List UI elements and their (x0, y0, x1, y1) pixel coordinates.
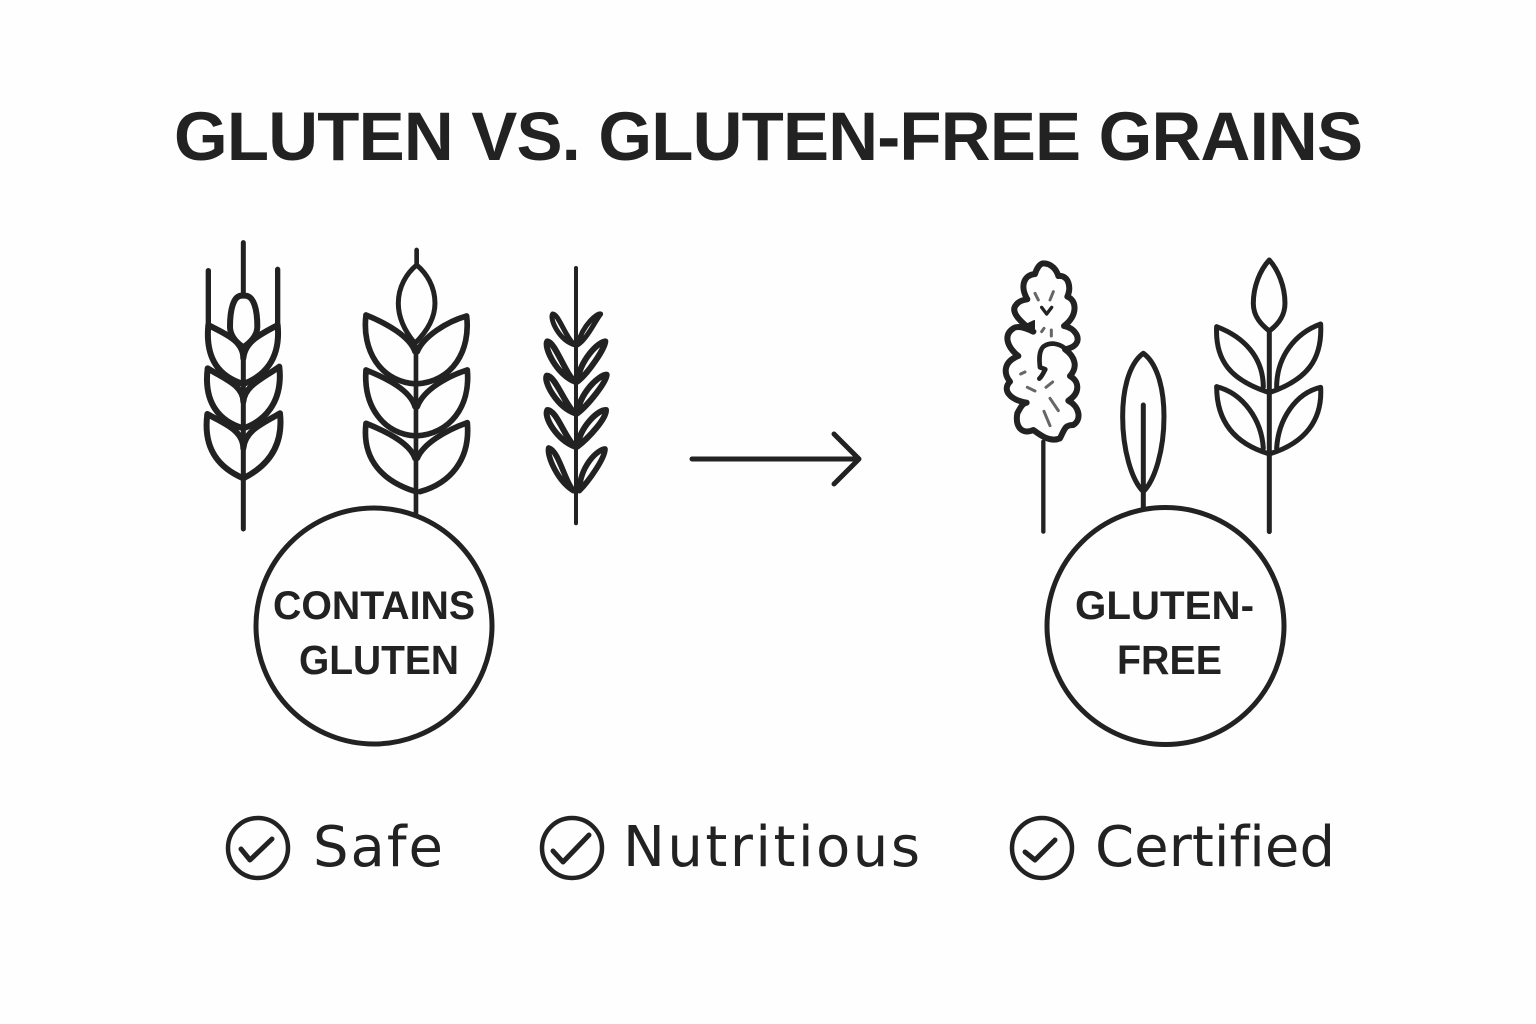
badge: contains gluten: GLUTEN (299, 637, 459, 683)
badge: gluten-free: FREE (1117, 637, 1222, 683)
icon: wheat with awns (207, 243, 280, 529)
icon: millet (1123, 353, 1164, 508)
badge: gluten-free: GLUTEN- (1075, 584, 1254, 628)
item: safe: Safe (313, 815, 443, 880)
item: nutritious: Nutritious (623, 815, 920, 880)
badge: contains gluten (256, 508, 492, 744)
badge: contains gluten: CONTAINS (273, 584, 475, 628)
item: safe (228, 815, 443, 880)
arrow (692, 434, 859, 484)
badge: gluten-free (1047, 508, 1284, 744)
title: GLUTEN VS. GLUTEN-FREE GRAINS (174, 98, 1363, 175)
icon: barley (365, 250, 468, 513)
icon: rye (546, 268, 607, 523)
icon: sorghum (1217, 260, 1321, 532)
item: certified: Certified (1095, 815, 1335, 880)
icon: quinoa (1006, 263, 1079, 532)
